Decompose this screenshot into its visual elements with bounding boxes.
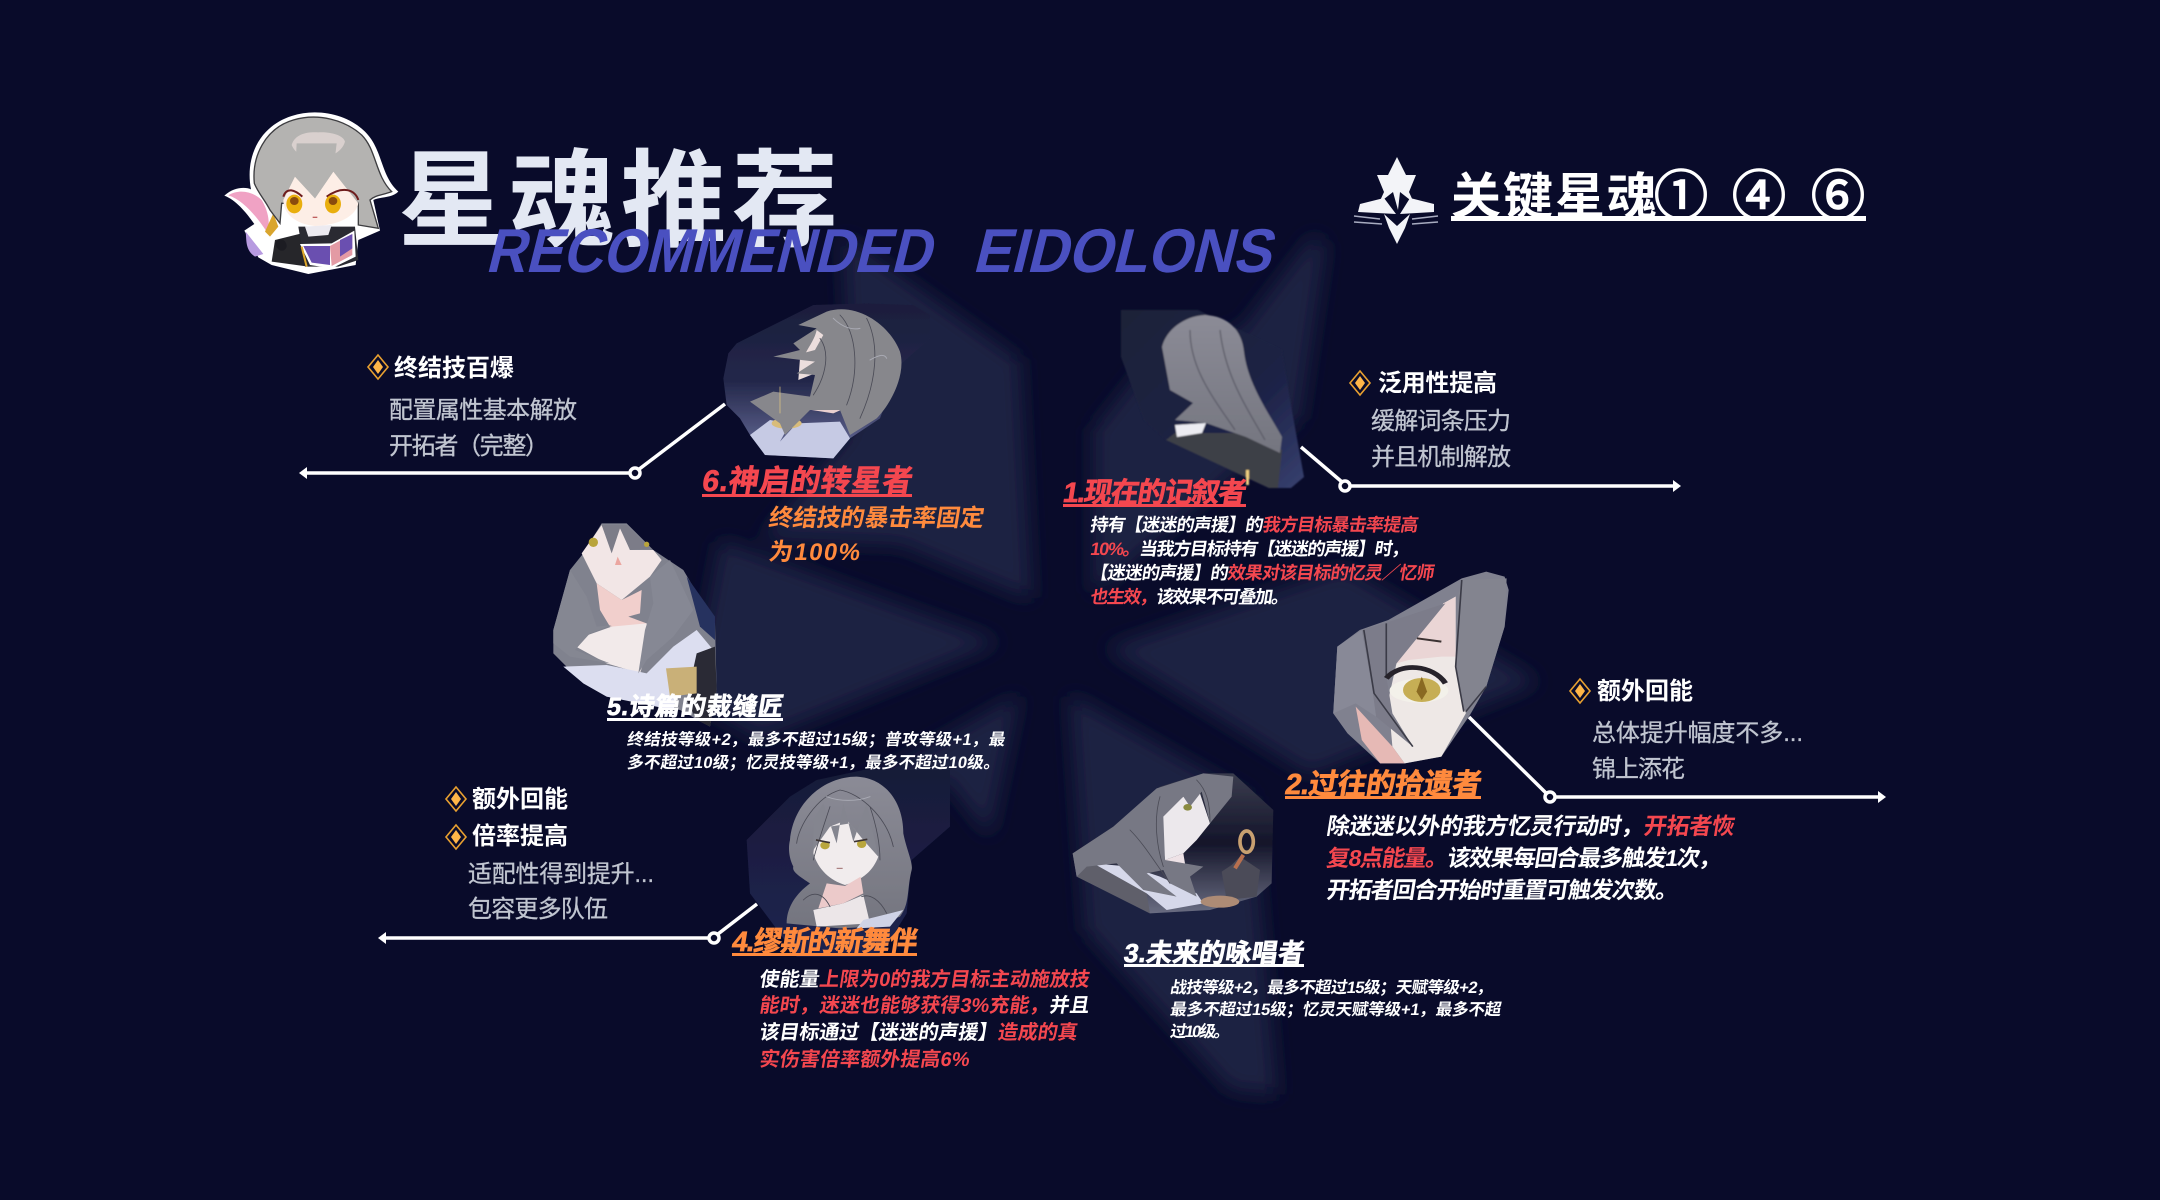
note: 配置属性基本解放 — [389, 397, 577, 424]
title: 星魂推荐 — [398, 143, 838, 261]
note: 总体提升幅度不多... — [1592, 720, 1803, 747]
tag: ultimate crit: 终结技百爆 — [394, 355, 514, 382]
panel: eidolon 6: 为100% — [767, 539, 862, 566]
heading: 2.过往的拾遗者 — [1283, 768, 1484, 801]
description: 战技等级+2，最多不超过15级；天赋等级+2， — [1169, 977, 1495, 997]
panel: eidolon 1: 并且机制解放 — [1371, 444, 1511, 471]
portrait: eidolon 5 — [553, 523, 717, 727]
panel: eidolon 2 — [1283, 572, 1886, 903]
description — [1089, 514, 1436, 607]
description: 也生效，该效果不可叠加。 — [1089, 586, 1291, 607]
key eidolons label: 关键星魂 — [1451, 169, 1657, 225]
subtitle: RECOMMENDED EIDOLONS: RECOMMENDED — [482, 217, 944, 286]
portrait: eidolon 3 — [1073, 773, 1273, 913]
panel: eidolon 5 — [553, 523, 1008, 772]
connector line and arrow — [1469, 717, 1886, 803]
panel: eidolon 6: 开拓者（完整） — [389, 433, 549, 460]
heading: 1.现在的记叙者 — [1061, 476, 1249, 508]
description: 终结技的暴击率固定 — [767, 505, 986, 532]
key eidolon numbers: ⑥ — [1811, 167, 1865, 227]
heading: 4.缪斯的新舞伴 — [730, 925, 920, 957]
note: 缓解词条压力 — [1371, 408, 1511, 435]
key eidolon numbers: ④ — [1732, 167, 1786, 227]
connector line and arrow — [378, 904, 757, 944]
subtitle: RECOMMENDED EIDOLONS: EIDOLONS — [969, 217, 1284, 286]
description — [1169, 977, 1504, 1041]
description: 持有【迷迷的声援】的我方目标暴击率提高 — [1089, 514, 1420, 535]
key eidolons header — [1354, 157, 1866, 244]
panel: eidolon 6 — [299, 303, 986, 566]
description: 过10级。 — [1169, 1021, 1232, 1041]
description: 使能量上限为0的我方目标主动施放技 — [758, 967, 1092, 991]
key eidolon numbers: ① — [1654, 167, 1708, 227]
tag: extra energy: 额外回能 — [1597, 678, 1693, 705]
portrait: eidolon 2 — [1333, 572, 1509, 763]
tag: versatility: 泛用性提高 — [1378, 370, 1497, 397]
portrait: eidolon 6 — [723, 303, 930, 458]
description — [626, 729, 1008, 772]
description: 复8点能量。该效果每回合最多触发1次， — [1325, 845, 1724, 871]
description: 实伤害倍率额外提高6% — [758, 1047, 972, 1071]
description: 10%。当我方目标持有【迷迷的声援】时， — [1089, 538, 1411, 559]
key eidolon numbers — [1654, 167, 1865, 227]
panel: eidolon 4: 包容更多队伍 — [468, 896, 608, 923]
description: 除迷迷以外的我方忆灵行动时，开拓者恢 — [1325, 813, 1737, 839]
panel: eidolon 1 — [1061, 310, 1681, 607]
portrait: eidolon 1 — [1121, 310, 1304, 488]
tag: multiplier up: 倍率提高 — [472, 822, 568, 850]
tag: extra energy: 额外回能 — [472, 786, 568, 813]
description: 该目标通过【迷迷的声援】造成的真 — [758, 1020, 1080, 1044]
description — [758, 967, 1092, 1071]
heading: 3.未来的咏唱者 — [1122, 938, 1307, 968]
description: 终结技等级+2，最多不超过15级；普攻等级+1，最 — [626, 729, 1008, 749]
portrait: eidolon 4 — [747, 770, 950, 957]
heading: 6.神启的转星者 — [700, 464, 915, 498]
description: 【迷迷的声援】的效果对该目标的忆灵／忆师 — [1089, 562, 1436, 583]
icon: star emblem — [1354, 157, 1438, 244]
icon: chibi character avatar — [224, 112, 398, 274]
description: 开拓者回合开始时重置可触发次数。 — [1325, 877, 1681, 903]
description — [1325, 813, 1737, 903]
panel: eidolon 2: 锦上添花 — [1592, 756, 1685, 783]
description: 最多不超过15级；忆灵天赋等级+1，最多不超 — [1169, 999, 1504, 1019]
connector line and arrow — [299, 404, 725, 479]
panel: eidolon 3 — [1073, 773, 1504, 1041]
panel: eidolon 4 — [378, 770, 1092, 1071]
description: 多不超过10级；忆灵技等级+1，最多不超过10级。 — [626, 752, 1002, 772]
heading: 5.诗篇的裁缝匠 — [605, 693, 785, 721]
description: 能时，迷迷也能够获得3%充能，并且 — [758, 994, 1092, 1017]
subtitle: RECOMMENDED EIDOLONS — [482, 217, 1284, 286]
note: 适配性得到提升... — [468, 861, 654, 888]
connector line and arrow — [1301, 447, 1681, 492]
background logo watermark — [690, 234, 1540, 1095]
